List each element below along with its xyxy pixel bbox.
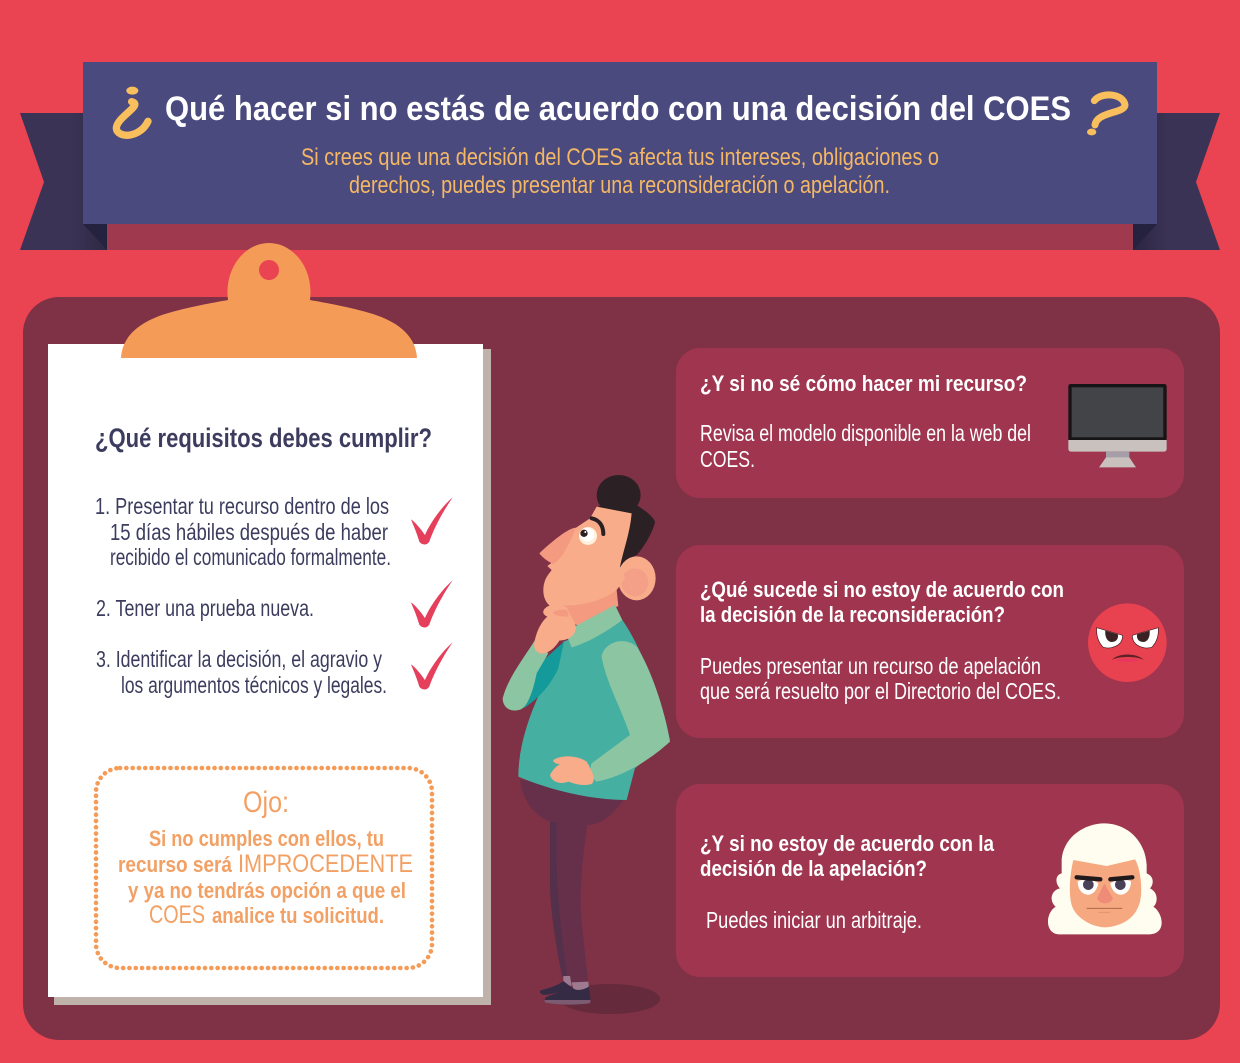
card text: Puedes iniciar un arbitraje. <box>706 907 922 933</box>
card heading <box>700 831 995 881</box>
panel: clipboard <box>48 243 491 1005</box>
card heading: ¿Qué sucede si no estoy de acuerdo con <box>700 577 1064 602</box>
card text: COES. <box>700 446 755 472</box>
card background <box>676 348 1184 498</box>
icon: opening question mark <box>116 87 148 135</box>
icon: check mark 3 <box>411 642 453 690</box>
text block: requirement 3 <box>96 646 387 698</box>
banner under strip <box>107 224 1133 250</box>
clip hole <box>259 260 279 280</box>
legs and shoes <box>520 780 631 1005</box>
left ribbon tail <box>20 113 107 250</box>
card background <box>676 545 1184 738</box>
card heading: ¿Y si no sé cómo hacer mi recurso? <box>700 371 1027 396</box>
icon: check mark 1 <box>411 497 453 545</box>
banner fold left <box>83 224 107 250</box>
callout text: analice tu solicitud. <box>212 903 384 928</box>
icon: check mark 2 <box>411 580 453 628</box>
text block: subtitle <box>301 144 939 199</box>
illustration: thinking man <box>503 475 670 1014</box>
card text: Revisa el modelo disponible en la web del <box>700 420 1031 446</box>
callout heading: Ojo: <box>243 786 289 819</box>
text block: subtitle: Si crees que una decisión del COES afecta tus intereses, obligaciones o <box>301 144 939 171</box>
card heading: ¿Y si no estoy de acuerdo con la <box>700 831 995 856</box>
panel: main background <box>23 297 1220 1040</box>
card background <box>676 784 1184 977</box>
text block: requirement 1: 15 días hábiles después de haber <box>110 519 388 545</box>
callout text <box>118 826 413 929</box>
panel: question 2 card <box>676 545 1184 738</box>
callout text: y ya no tendrás opción a que el <box>128 878 406 903</box>
card heading: la decisión de la reconsideración? <box>700 602 1005 627</box>
callout text: Si no cumples con ellos, tu <box>149 826 384 851</box>
icon: judge face <box>1048 823 1162 934</box>
callout: warning box <box>96 768 432 968</box>
text block: requirement 1: recibido el comunicado formalmente. <box>110 544 391 570</box>
icon: angry face <box>1088 603 1167 682</box>
card text: Puedes presentar un recurso de apelación <box>700 653 1041 679</box>
heading: requirements: ¿Qué requisitos debes cumplir? <box>95 423 432 453</box>
banner face <box>83 62 1157 224</box>
callout text: COES <box>149 901 205 929</box>
icon: computer monitor <box>1068 384 1167 467</box>
callout text: IMPROCEDENTE <box>238 850 413 878</box>
card text: que será resuelto por el Directorio del COES. <box>700 678 1061 704</box>
heading: title: Qué hacer si no estás de acuerdo con una decisión del COES <box>165 90 1071 128</box>
text block: requirement 3: los argumentos técnicos y legales. <box>121 672 387 698</box>
callout text: recurso será <box>118 852 233 877</box>
right ribbon tail <box>1133 113 1220 250</box>
panel: question 1 card <box>676 348 1184 498</box>
banner <box>20 62 1220 250</box>
clipboard clip <box>121 243 417 358</box>
card heading <box>700 577 1064 627</box>
text block: requirement 2: 2. Tener una prueba nueva. <box>96 595 314 621</box>
paper <box>48 344 483 997</box>
card heading: decisión de la apelación? <box>700 856 927 881</box>
card text <box>700 420 1031 472</box>
card text <box>700 653 1061 704</box>
paper shadow <box>54 349 491 1005</box>
text block: requirement 3: 3. Identificar la decisión, el agravio y <box>96 646 382 672</box>
ground shadow <box>560 984 660 1014</box>
banner fold right <box>1133 224 1157 250</box>
upper body and head <box>503 475 670 800</box>
panel: question 3 card <box>676 784 1184 977</box>
text block: subtitle: derechos, puedes presentar una reconsideración o apelación. <box>349 172 890 199</box>
text block: requirement 1: 1. Presentar tu recurso dentro de los <box>95 493 389 519</box>
dotted border <box>96 768 432 968</box>
text block: requirement 1 <box>95 493 391 570</box>
icon: closing question mark <box>1087 95 1125 135</box>
